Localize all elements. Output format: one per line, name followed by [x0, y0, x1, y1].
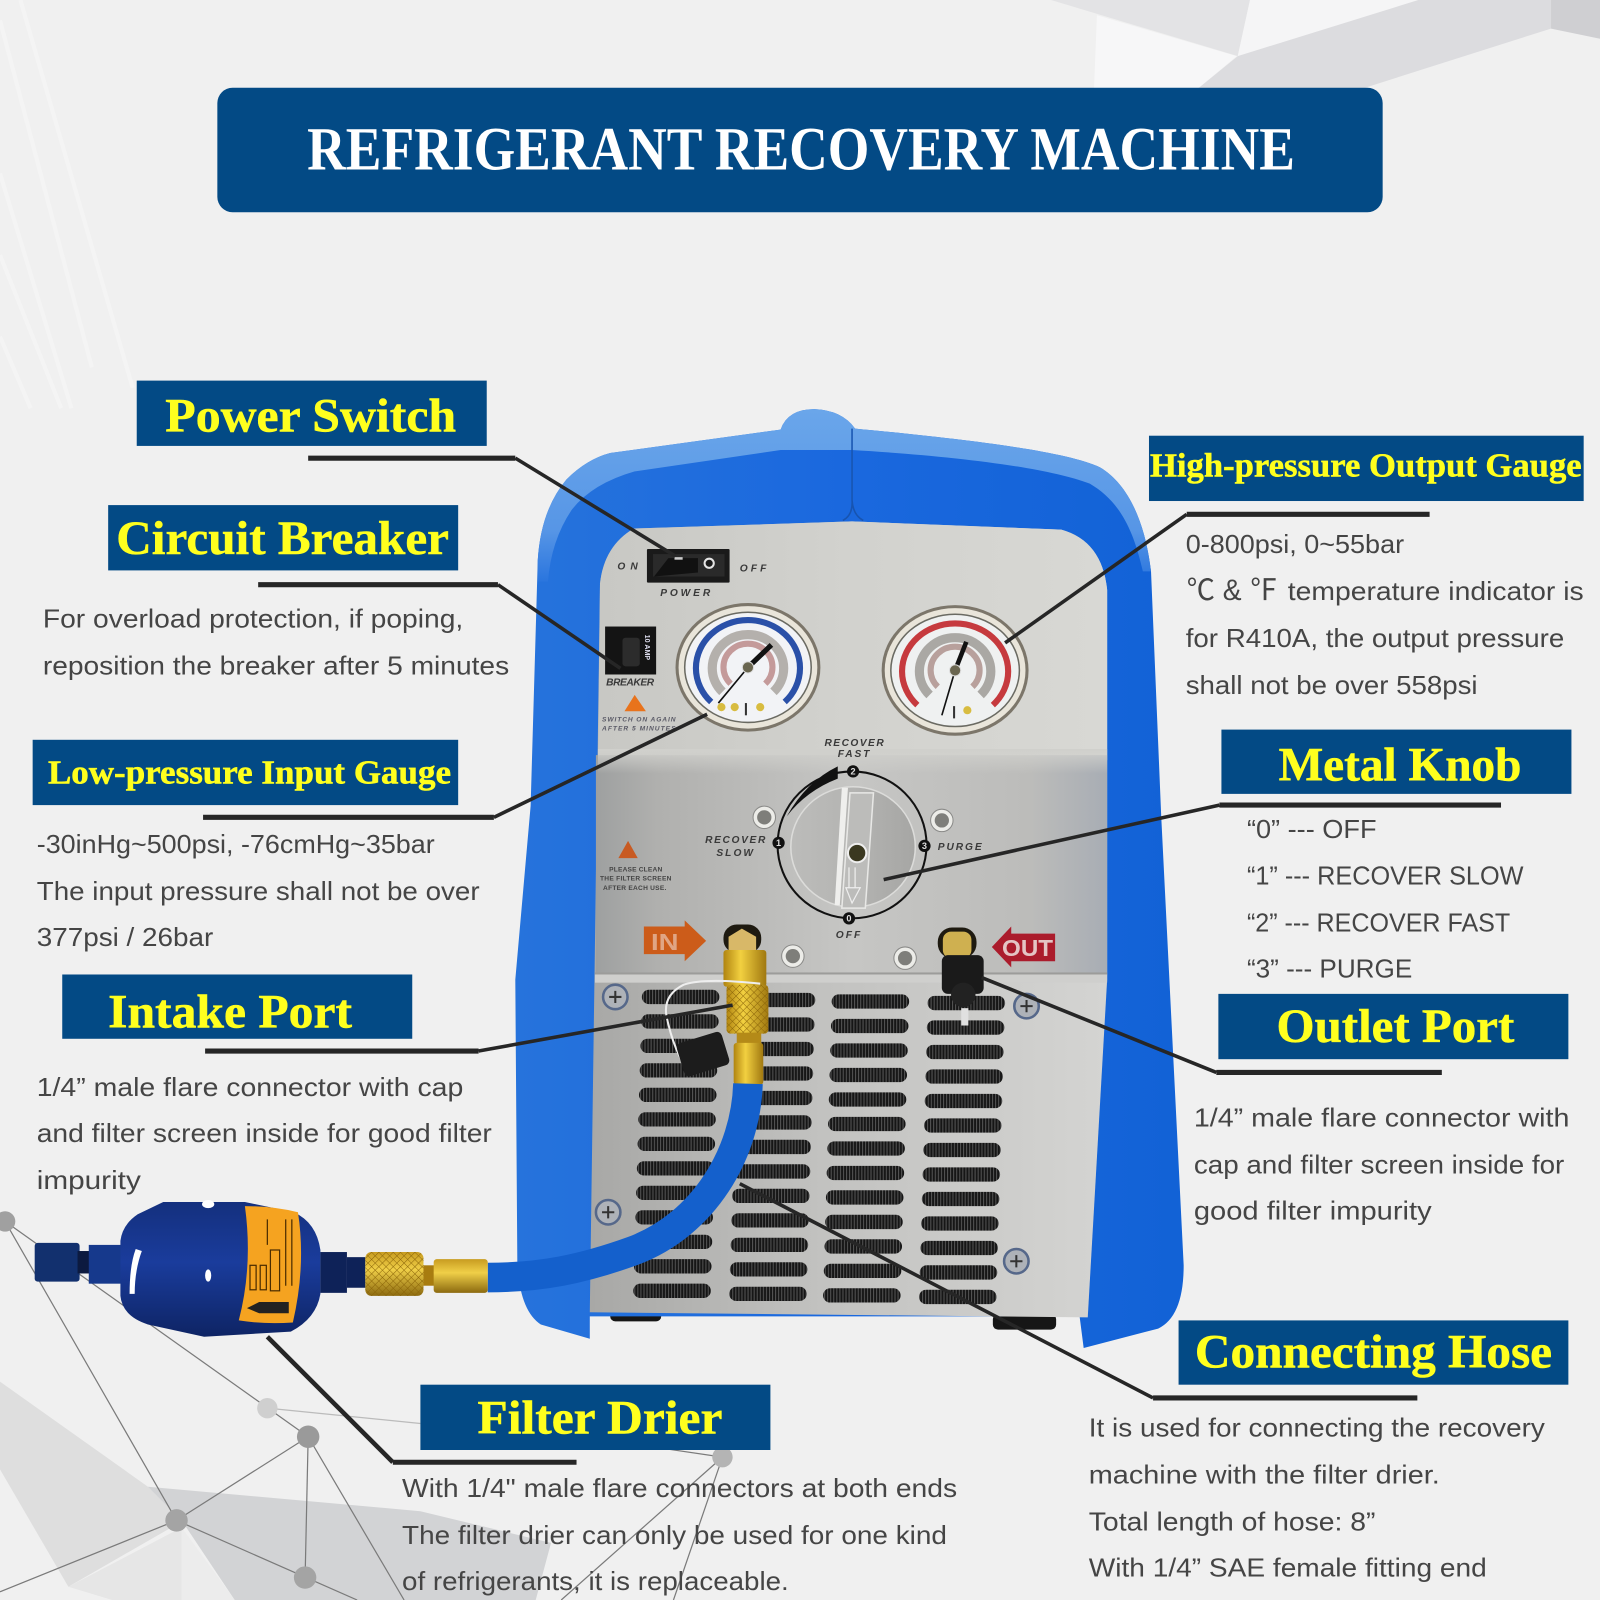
callout: intake port [37, 974, 733, 1195]
out arrow: OUT [1002, 935, 1054, 961]
rotary selector: 2 [851, 766, 856, 776]
text: intake port: and filter screen inside for good filter [37, 1120, 492, 1148]
heading: metal knob: Metal Knob [1279, 739, 1521, 792]
text: low-pressure gauge: The input pressure shall not be over [37, 878, 480, 906]
power switch [617, 549, 767, 599]
heading: high-pressure gauge: High-pressure Output Gauge [1150, 448, 1582, 485]
text: connecting hose: With 1/4” SAE female fitting end [1089, 1555, 1487, 1583]
heading: filter drier [420, 1385, 770, 1450]
callout: high-pressure output gauge [1005, 436, 1584, 700]
shell seam [843, 429, 863, 520]
heading: filter drier: Filter Drier [478, 1392, 722, 1445]
callout: circuit breaker [43, 505, 620, 680]
in arrow [644, 920, 706, 961]
text: filter drier: of refrigerants, it is replaceable. [402, 1568, 789, 1596]
leader line: connecting hose [740, 1184, 1417, 1398]
power switch: POWER [660, 588, 711, 599]
blue shell [515, 409, 1184, 1348]
circuit breaker: BREAKER [606, 678, 655, 689]
callout: outlet port [982, 978, 1569, 1225]
leader line: filter drier [267, 1337, 577, 1462]
machine feet [610, 1310, 1056, 1330]
heading: intake port [62, 974, 412, 1039]
caution label: AFTER EACH USE. [603, 885, 666, 892]
text: connecting hose: It is used for connecting the recovery [1089, 1415, 1545, 1443]
plate fold [595, 972, 1107, 983]
text: outlet port: 1/4” male flare connector with [1194, 1105, 1569, 1133]
text: outlet port [1194, 1105, 1569, 1225]
outlet hex [320, 1252, 365, 1293]
text: low-pressure gauge [37, 831, 480, 952]
drier highlights [130, 1200, 214, 1294]
text: filter drier [402, 1475, 957, 1596]
machine panel [590, 521, 1107, 1317]
text: connecting hose: machine with the filter drier. [1089, 1462, 1440, 1490]
leader line: intake port [205, 1005, 733, 1051]
high pressure gauge [882, 605, 1029, 736]
text: low-pressure gauge: 377psi / 26bar [37, 924, 214, 952]
heading: low-pressure input gauge: Low-pressure Input Gauge [48, 755, 451, 792]
connecting hose [488, 1084, 748, 1278]
leader line: low-pressure gauge [203, 714, 707, 817]
in arrow: IN [651, 929, 679, 955]
circuit breaker [601, 627, 676, 733]
circuit breaker: SWITCH ON AGAIN [602, 716, 676, 723]
leader line: high-pressure gauge [1005, 514, 1430, 643]
text: high-pressure gauge [1186, 531, 1584, 700]
text: outlet port: cap and filter screen inside for [1194, 1151, 1565, 1179]
power switch: OFF [740, 563, 767, 574]
heading: circuit breaker: Circuit Breaker [116, 512, 449, 565]
low pressure gauge [676, 603, 820, 732]
outlet port [938, 928, 984, 1026]
text: metal knob: “1” --- RECOVER SLOW [1247, 863, 1523, 891]
text: intake port [37, 1074, 492, 1195]
circuit breaker: 10 AMP [643, 635, 651, 660]
rotary selector [705, 738, 983, 941]
drier body [120, 1202, 320, 1337]
text: high-pressure gauge: for R410A, the output pressure [1186, 625, 1564, 653]
rotary selector: 3 [922, 841, 927, 851]
heading: high-pressure gauge [1149, 436, 1584, 501]
inlet stub [35, 1243, 122, 1284]
background polygons top right [1051, 0, 1600, 92]
text: connecting hose: Total length of hose: 8” [1089, 1509, 1376, 1537]
caution label: PLEASE CLEAN [609, 866, 662, 873]
middle metal plate [596, 755, 1107, 976]
rotary selector: OFF [836, 930, 861, 941]
rotary selector: RECOVER [824, 738, 884, 749]
rotary selector: SLOW [716, 848, 754, 859]
rotary selector: RECOVER [705, 835, 766, 846]
orange label [239, 1206, 301, 1323]
plate blend [598, 749, 1107, 773]
rotary selector: PURGE [938, 842, 983, 853]
circuit breaker: AFTER 5 MINUTES [601, 726, 676, 733]
leader line: metal knob [884, 805, 1501, 880]
vent slots [633, 990, 1005, 1304]
power switch: ON [617, 561, 638, 572]
text: low-pressure gauge: -30inHg~500psi, -76cmHg~35bar [37, 831, 435, 859]
background faint lines top left [0, 0, 133, 408]
heading: connecting hose: Connecting Hose [1195, 1325, 1552, 1378]
text: high-pressure gauge: ℃ & ℉ [1187, 574, 1278, 607]
leader line: circuit breaker [258, 585, 620, 668]
background polygons bottom left [0, 1382, 551, 1600]
heading: intake port: Intake Port [108, 986, 352, 1039]
text: circuit breaker: reposition the breaker after 5 minutes [43, 652, 509, 680]
text: high-pressure gauge: 0-800psi, 0~55bar [1186, 531, 1405, 559]
callout: connecting hose [740, 1184, 1568, 1583]
text: intake port: impurity [37, 1167, 141, 1195]
panel screws [596, 806, 1039, 1273]
callout: filter drier [267, 1337, 957, 1596]
heading: outlet port: Outlet Port [1277, 1000, 1514, 1053]
callout: power switch [137, 381, 676, 556]
rotary selector: 1 [776, 838, 781, 848]
title banner: REFRIGERANT RECOVERY MACHINE [307, 115, 1295, 183]
text: metal knob: “3” --- PURGE [1247, 956, 1412, 984]
title banner [217, 88, 1383, 212]
upper panel [598, 521, 1107, 760]
text: high-pressure gauge: temperature indicator is [1288, 578, 1584, 606]
callout: metal knob [884, 730, 1571, 984]
filter drier [35, 1200, 488, 1337]
brass ferrule [423, 1259, 488, 1293]
heading: power switch [137, 381, 487, 446]
recovery machine [515, 409, 1184, 1348]
text: filter drier: With 1/4" male flare connectors at both ends [402, 1475, 957, 1503]
text: metal knob [1247, 816, 1523, 984]
leader line: outlet port [982, 978, 1442, 1072]
out arrow [992, 927, 1055, 967]
shell light rim [538, 409, 1151, 582]
heading: power switch: Power Switch [165, 390, 456, 443]
heading: metal knob [1221, 730, 1571, 794]
rotary selector: FAST [838, 749, 870, 760]
caution label [600, 841, 672, 892]
intake port [666, 924, 768, 1085]
text: metal knob: “0” --- OFF [1247, 816, 1377, 844]
text: outlet port: good filter impurity [1194, 1197, 1432, 1225]
background network [0, 1211, 733, 1600]
callout: low-pressure input gauge [33, 714, 707, 952]
text: intake port: 1/4” male flare connector with cap [37, 1074, 463, 1102]
text: circuit breaker: For overload protection, if poping, [43, 606, 463, 634]
caution label: THE FILTER SCREEN [600, 876, 672, 883]
text: metal knob: “2” --- RECOVER FAST [1247, 910, 1510, 938]
text: connecting hose [1089, 1415, 1545, 1583]
text: circuit breaker [43, 606, 509, 680]
heading: outlet port [1218, 994, 1568, 1059]
text: filter drier: The filter drier can only be used for one kind [402, 1522, 947, 1550]
rotary selector: 0 [846, 913, 852, 923]
leader line: power switch [308, 458, 676, 556]
heading: low-pressure input gauge [33, 740, 458, 805]
text: high-pressure gauge: shall not be over 558psi [1186, 672, 1478, 700]
brass nut [365, 1252, 423, 1296]
